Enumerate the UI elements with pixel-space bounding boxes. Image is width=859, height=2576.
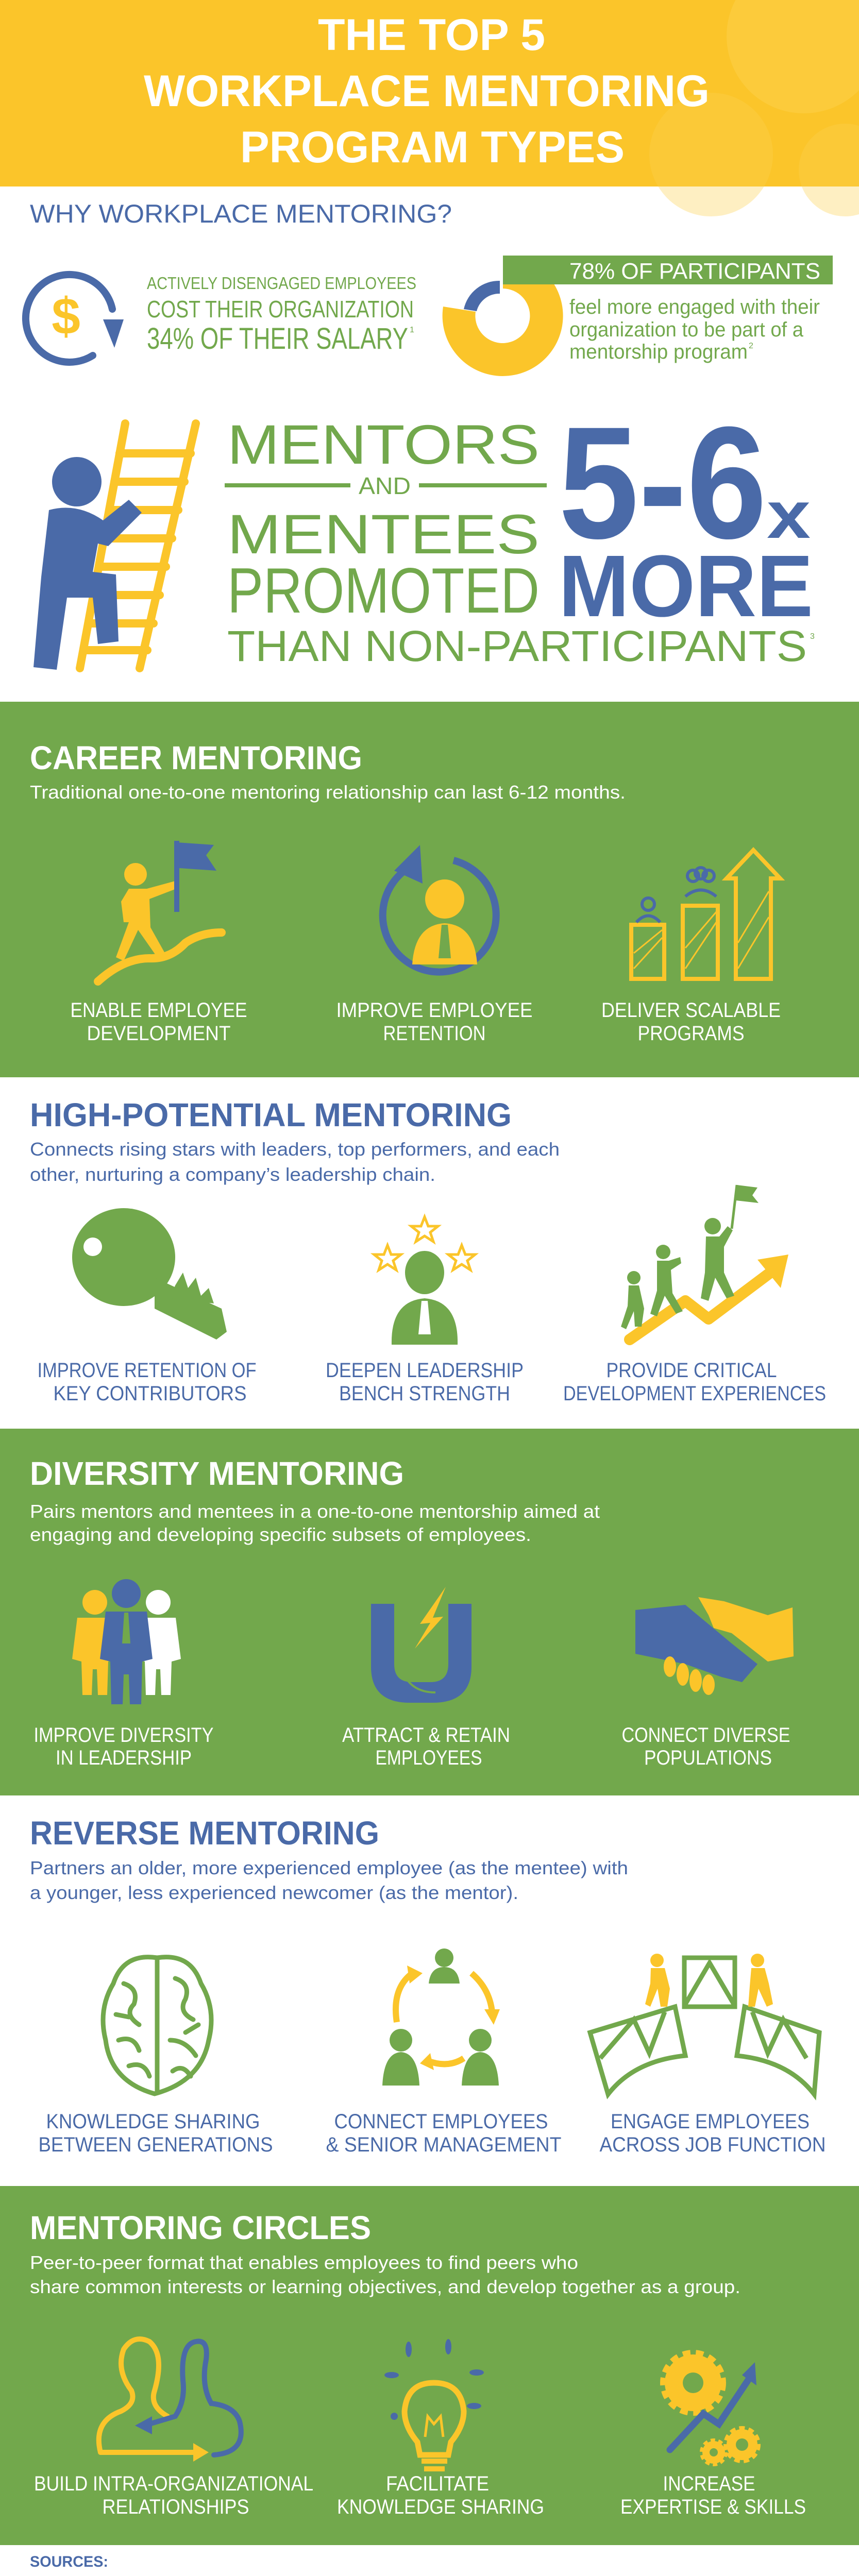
stat: disengaged employees cost [147, 274, 416, 355]
icon: peer heads with arrows [99, 2339, 241, 2462]
title: PROGRAM TYPES [240, 123, 625, 172]
heading: high-potential: HIGH-POTENTIAL MENTORING [30, 1096, 512, 1133]
stat: disengaged employees cost: 1 [410, 326, 414, 334]
icon: bridge across functions [590, 1954, 819, 2094]
stat: 5-6x more: MORE [559, 537, 813, 635]
stat: 5-6x more: 5-6 [559, 393, 767, 572]
stat: disengaged employees cost: COST THEIR ORGANIZATION [147, 296, 414, 323]
icon: key [72, 1208, 227, 1340]
icon: person with flag [98, 841, 222, 981]
labels: high-potential benefits: KEY CONTRIBUTORS [54, 1382, 246, 1405]
title: THE TOP 5 [318, 10, 545, 60]
description: reverse [30, 1857, 628, 1903]
labels: mentoring circles benefits: EXPERTISE & SKILLS [620, 2496, 806, 2518]
stat: 5-6x more [559, 393, 813, 635]
labels: high-potential benefits: DEEPEN LEADERSHIP [326, 1359, 524, 1382]
labels: career benefits: ENABLE EMPLOYEE [70, 999, 247, 1022]
labels: diversity benefits: EMPLOYEES [375, 1747, 482, 1769]
description: diversity: Pairs mentors and mentees in a one-to-one mentorship aimed at [30, 1501, 600, 1522]
headline: mentors and mentees promoted: MENTORS [227, 413, 540, 476]
stat: 78% of participants: feel more engaged with their [569, 296, 820, 318]
description: mentoring circles: share common interests or learning objectives, and develop together as a group. [30, 2276, 740, 2297]
labels: diversity benefits [34, 1724, 790, 1769]
description: diversity: engaging and developing specific subsets of employees. [30, 1524, 531, 1545]
labels: mentoring circles benefits: KNOWLEDGE SHARING [337, 2496, 544, 2518]
labels: high-potential benefits: PROVIDE CRITICAL [606, 1359, 777, 1382]
stat: 78% of participants: 2 [749, 342, 753, 350]
labels: mentoring circles benefits [34, 2472, 806, 2518]
heading: reverse: REVERSE MENTORING [30, 1815, 379, 1852]
stat: disengaged employees cost: 34% OF THEIR SALARY [147, 322, 408, 355]
headline: mentors and mentees promoted: MENTEES [227, 503, 540, 565]
heading: mentoring circles: MENTORING CIRCLES [30, 2209, 371, 2246]
labels: reverse benefits: ENGAGE EMPLOYEES [611, 2110, 810, 2133]
labels: reverse benefits: CONNECT EMPLOYEES [334, 2110, 548, 2133]
panel: reverse mentoring [30, 1815, 826, 2156]
heading: why workplace mentoring: WHY WORKPLACE MENTORING? [30, 199, 452, 228]
labels: mentoring circles benefits: BUILD INTRA-ORGANIZATIONAL [34, 2472, 313, 2495]
description: high-potential: Connects rising stars with leaders, top performers, and each [30, 1139, 560, 1160]
description: high-potential: other, nurturing a company’s leadership chain. [30, 1164, 435, 1185]
headline: mentors and mentees promoted: THAN NON-PARTICIPANTS [227, 622, 807, 670]
labels: reverse benefits: KNOWLEDGE SHARING [46, 2110, 260, 2133]
description: mentoring circles [30, 2252, 740, 2297]
labels: career benefits: RETENTION [383, 1022, 485, 1045]
labels: reverse benefits: & SENIOR MANAGEMENT [326, 2133, 562, 2156]
icon: connected employees cycle [382, 1948, 500, 2086]
stat: 78% of participants [503, 256, 833, 363]
stat: 78% of participants: organization to be part of a [569, 318, 804, 341]
icon: lightbulb [384, 2339, 484, 2471]
labels: diversity benefits: IMPROVE DIVERSITY [34, 1724, 213, 1747]
labels: career benefits: PROGRAMS [638, 1022, 744, 1045]
icon: dollar cycle [26, 275, 124, 362]
labels: diversity benefits: ATTRACT & RETAIN [342, 1724, 510, 1747]
labels: diversity benefits: CONNECT DIVERSE [621, 1724, 790, 1747]
icon: brain [103, 1957, 211, 2094]
labels: career benefits: IMPROVE EMPLOYEE [336, 999, 533, 1022]
labels: diversity benefits: IN LEADERSHIP [56, 1747, 192, 1769]
header banner [0, 0, 859, 216]
description: diversity [30, 1501, 600, 1545]
icon: gears and growth arrow [665, 2354, 757, 2464]
icon: three diverse people [72, 1579, 181, 1704]
icon: climbing figures with arrow [621, 1185, 788, 1340]
panel: high-potential mentoring [30, 1096, 826, 1405]
icon: magnet with bolt [371, 1587, 471, 1703]
stat: 5-6x more: x [767, 477, 811, 552]
labels: high-potential benefits [37, 1359, 826, 1405]
headline: mentors and mentees promoted: 3 [810, 632, 815, 641]
labels: reverse benefits: BETWEEN GENERATIONS [38, 2133, 273, 2156]
labels: diversity benefits: POPULATIONS [644, 1747, 772, 1769]
headline: mentors and mentees promoted: AND [359, 472, 411, 499]
headline: mentors and mentees promoted [225, 413, 815, 670]
description: high-potential [30, 1139, 560, 1185]
panel: mentoring circles [0, 2186, 859, 2545]
donut chart: 78% [443, 256, 563, 376]
description: reverse: a younger, less experienced newcomer (as the mentor). [30, 1882, 518, 1903]
labels: high-potential benefits: IMPROVE RETENTION OF [37, 1359, 257, 1382]
stat: disengaged employees cost: ACTIVELY DISENGAGED EMPLOYEES [147, 274, 416, 293]
labels: reverse benefits [38, 2110, 826, 2156]
description: reverse: Partners an older, more experienced employee (as the mentee) with [30, 1857, 628, 1878]
labels: career benefits: DEVELOPMENT [87, 1022, 231, 1045]
icon: handshake [635, 1597, 794, 1695]
icon: person climbing ladder [33, 423, 196, 670]
labels: mentoring circles benefits: RELATIONSHIPS [102, 2496, 249, 2518]
labels: mentoring circles benefits: FACILITATE [386, 2472, 489, 2495]
headline: mentors and mentees promoted: PROMOTED [227, 555, 540, 626]
labels: reverse benefits: ACROSS JOB FUNCTION [600, 2133, 826, 2156]
title [144, 10, 710, 172]
icon: leader with stars [374, 1217, 475, 1345]
title: WORKPLACE MENTORING [144, 66, 710, 116]
labels: career benefits: DELIVER SCALABLE [601, 999, 781, 1022]
labels: mentoring circles benefits: INCREASE [663, 2472, 755, 2495]
heading: diversity: DIVERSITY MENTORING [30, 1455, 404, 1492]
icon: scalable bars [631, 850, 780, 979]
description: mentoring circles: Peer-to-peer format that enables employees to find peers who [30, 2252, 578, 2273]
panel: diversity mentoring [0, 1429, 859, 1795]
stat: 78% of participants: mentorship program [569, 341, 748, 363]
sources: SOURCES: [30, 2553, 108, 2570]
labels: career benefits [70, 999, 781, 1045]
description: career: Traditional one-to-one mentoring relationship can last 6-12 months. [30, 782, 626, 803]
stat: 78% of participants: 78% OF PARTICIPANTS [569, 259, 820, 284]
icon: dollar cycle: $ [52, 287, 80, 345]
panel: career mentoring [0, 702, 859, 1077]
heading: career mentoring: CAREER MENTORING [30, 739, 362, 776]
icon: retention circle [383, 845, 496, 972]
labels: high-potential benefits: BENCH STRENGTH [339, 1382, 510, 1405]
